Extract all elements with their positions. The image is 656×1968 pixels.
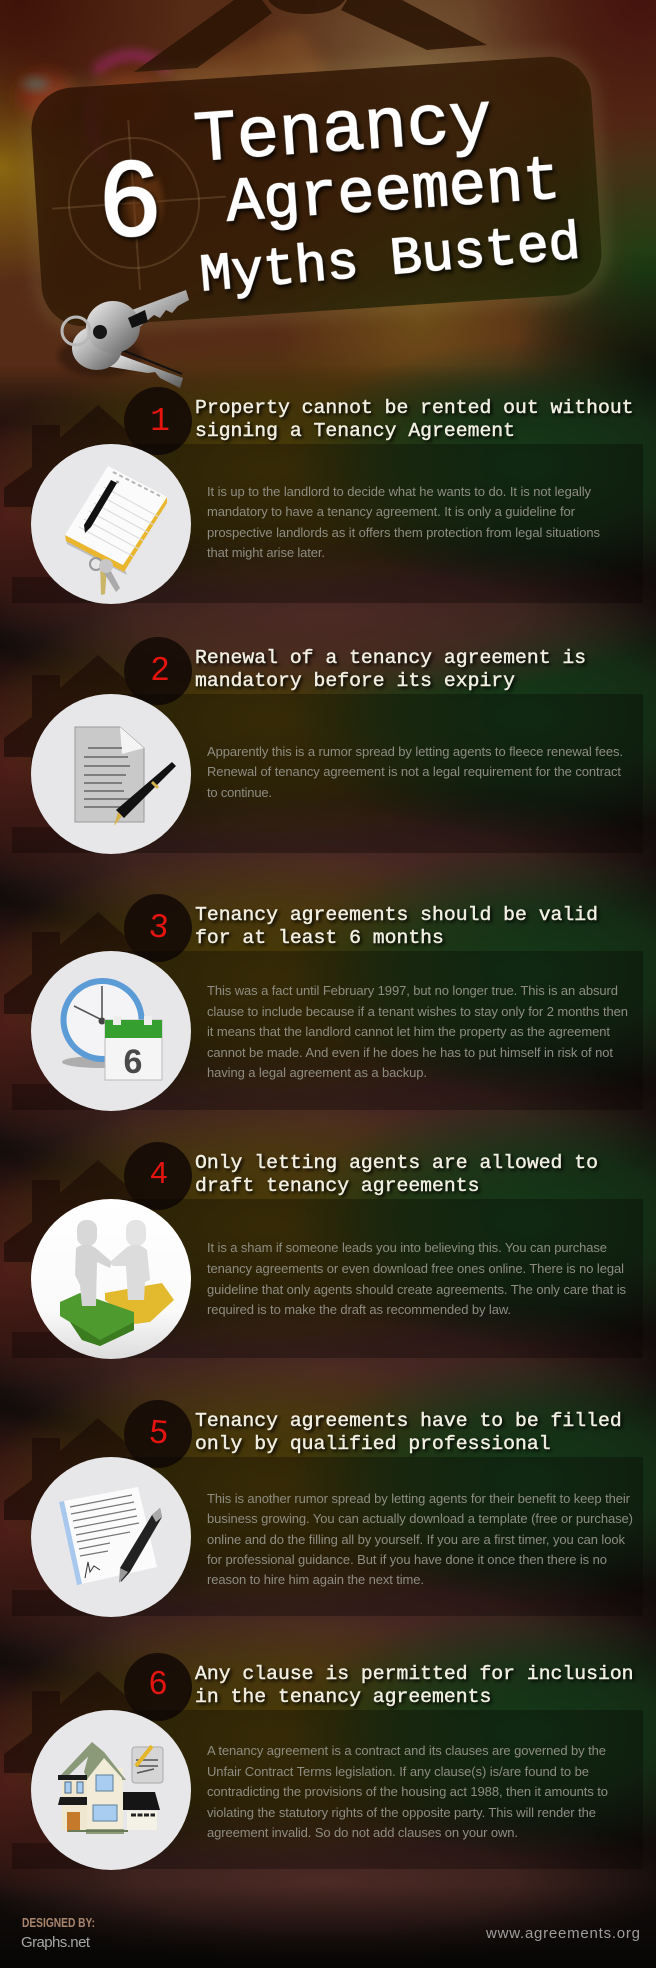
- title: Agreement: Agreement: [224, 145, 563, 240]
- panel: house silhouette and panel 2: [4, 637, 643, 853]
- number 6: 6: [149, 1664, 167, 1701]
- number 5: 5: [148, 1412, 170, 1451]
- body text 5: This is another rumor spread by letting agents for their benefit to keep their: [207, 1491, 631, 1506]
- section 5: [4, 1400, 643, 1617]
- title: Tenancy: Tenancy: [192, 82, 495, 182]
- roof silhouette: [134, 0, 487, 72]
- number 4: 4: [150, 1155, 168, 1190]
- body text 1: mandatory to have a tenancy agreement. It is only a guideline for: [207, 504, 576, 519]
- heading 3: for at least 6 months: [195, 927, 444, 949]
- panel: house silhouette and panel 6: [4, 1653, 643, 1869]
- icon: clock and calendar: 6: [124, 1043, 142, 1081]
- heading 3: [195, 904, 598, 949]
- heading 5: only by qualified professional: [195, 1433, 551, 1455]
- number 3: 3: [148, 906, 170, 945]
- heading 4: [195, 1152, 598, 1197]
- body text 5: online and do the filling all by yourself. If you are a first timer, you can look: [207, 1532, 626, 1547]
- body text 3: cannot be made. And even if he does he has to put himself in risk of not: [207, 1045, 613, 1060]
- icon: signed letter and pen: [59, 1487, 162, 1585]
- section 3: [4, 894, 643, 1111]
- heading 2: [195, 647, 586, 692]
- blurred keys photo behind the title: [19, 30, 330, 190]
- image disc 5: [31, 1457, 191, 1617]
- body text 1: that might arise later.: [207, 545, 325, 560]
- heading 1: Property cannot be rented out without: [195, 397, 634, 419]
- body text 2: [207, 744, 623, 800]
- section 6: [4, 1653, 643, 1870]
- heading 5: Tenancy agreements have to be filled: [195, 1410, 622, 1432]
- panel: house silhouette and panel 3: [4, 894, 643, 1110]
- heading 1: signing a Tenancy Agreement: [195, 420, 515, 442]
- icon: house and document: [58, 1742, 163, 1834]
- body text 6: Unfair Contract Terms legislation. If any clause(s) is/are found to be: [207, 1764, 589, 1779]
- heading 6: [195, 1663, 634, 1708]
- body text 4: [207, 1240, 626, 1317]
- image disc 6: [31, 1710, 191, 1870]
- body text 4: It is a sham if someone leads you into believing this. You can purchase: [207, 1240, 607, 1255]
- body text 2: to continue.: [207, 785, 272, 800]
- heading 2: mandatory before its expiry: [195, 670, 515, 692]
- panel: house silhouette and panel 5: [4, 1400, 643, 1616]
- section 2: [4, 637, 643, 854]
- body text 5: business growing. You can actually download a template (free or purchase): [207, 1511, 633, 1526]
- panel: house silhouette and panel 4: [4, 1142, 643, 1358]
- body text 4: required is to make the draft as recommended by law.: [207, 1302, 511, 1317]
- crosshair target: [46, 114, 232, 296]
- body text 6: contradicting the provisions of the housing act 1988, then it amounts to: [207, 1784, 608, 1799]
- footer: designer credit: Graphs.net: [21, 1934, 91, 1951]
- body text 3: This was a fact until February 1997, but no longer true. This is an absurd: [207, 983, 618, 998]
- body text 6: violating the statutory rights of the opposite party. This will render the: [207, 1805, 596, 1820]
- icon: notepad with pen and keys: [65, 466, 167, 595]
- number 2: 2: [151, 650, 169, 687]
- body text 1: prospective landlords as it offers them protection from legal situations: [207, 525, 600, 540]
- body text 5: for professional guidance. But if you have done it once then there is no: [207, 1552, 607, 1567]
- body text 3: it means that the landlord cannot let him the property as the agreement: [207, 1024, 610, 1039]
- title: Myths Busted: Myths Busted: [197, 213, 583, 307]
- heading 4: Only letting agents are allowed to: [195, 1152, 598, 1174]
- icon: handshake on puzzle: [60, 1220, 174, 1346]
- body text 5: [207, 1491, 633, 1587]
- title: six: 6: [98, 139, 161, 259]
- title plaque: [29, 54, 604, 329]
- icon: clock and calendar: [60, 978, 162, 1081]
- body text 3: having a legal agreement as a backup.: [207, 1065, 427, 1080]
- body text 6: [207, 1743, 608, 1840]
- section 4: [4, 1142, 643, 1359]
- heading 6: Any clause is permitted for inclusion: [195, 1663, 634, 1685]
- body text 3: [207, 983, 628, 1080]
- image disc 2: [31, 694, 191, 854]
- number blob: [127, 170, 163, 234]
- icon: document and fountain pen: [75, 727, 176, 826]
- heading 5: [195, 1410, 622, 1455]
- heading 2: Renewal of a tenancy agreement is: [195, 647, 586, 669]
- body text 2: Renewal of tenancy agreement is not a legal requirement for the contract: [207, 764, 621, 779]
- number 1: 1: [150, 403, 170, 440]
- title: [98, 82, 583, 307]
- heading 6: in the tenancy agreements: [195, 1686, 491, 1708]
- footer: website: www.agreements.org: [485, 1925, 640, 1942]
- footer: designer credit: [21, 1915, 95, 1951]
- image disc 3: [31, 951, 191, 1111]
- image disc 4: [31, 1199, 191, 1359]
- body text 3: clause to include because if a tenant wishes to stay only for 2 months then: [207, 1004, 628, 1019]
- image disc 1: [31, 444, 191, 604]
- body text 4: guideline that only agents should create agreements. The only care that is: [207, 1282, 626, 1297]
- body text 6: agreement invalid. So do not add clauses on your own.: [207, 1825, 518, 1840]
- heading 4: draft tenancy agreements: [195, 1175, 479, 1197]
- body text 2: Apparently this is a rumor spread by letting agents to fleece renewal fees.: [207, 744, 623, 759]
- footer: designer credit: DESIGNED BY:: [22, 1915, 95, 1930]
- body text 6: A tenancy agreement is a contract and its clauses are governed by the: [207, 1743, 606, 1758]
- header background: [0, 0, 656, 430]
- section 1 background: [0, 340, 656, 700]
- heading 3: Tenancy agreements should be valid: [195, 904, 598, 926]
- body text 1: It is up to the landlord to decide what he wants to do. It is not legally: [207, 484, 592, 499]
- body text 4: tenancy agreements or even download free ones online. There is no legal: [207, 1261, 624, 1276]
- panel: house silhouette and panel 1: [4, 387, 643, 603]
- heading 1: [195, 397, 634, 442]
- icon: keys: [58, 290, 189, 388]
- body text 1: [207, 484, 600, 560]
- section 1: [4, 387, 643, 604]
- body text 5: reason to hire him again the next time.: [207, 1572, 424, 1587]
